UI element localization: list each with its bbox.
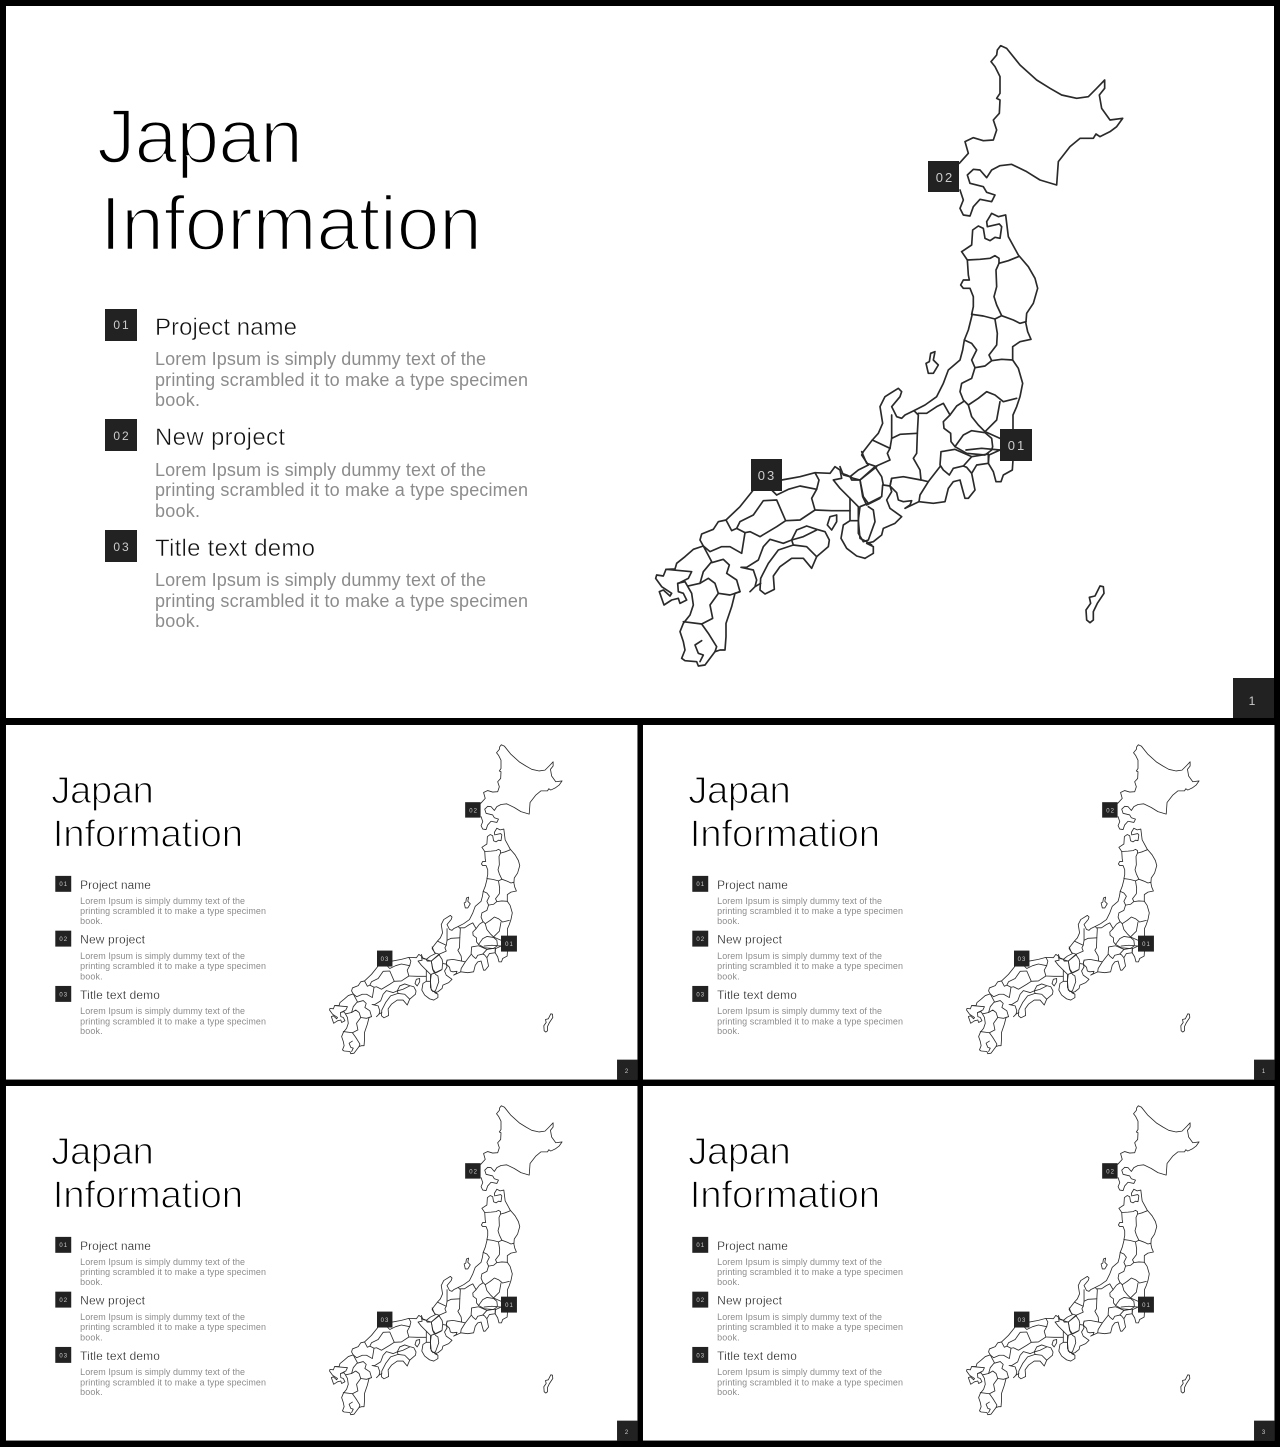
panel: thumbnail slide 2 <box>6 725 637 1080</box>
panel: thumbnail slide 5: 3 <box>1262 1430 1266 1436</box>
panel: thumbnail slide 2: 02 <box>469 809 478 815</box>
panel: thumbnail slide 2: printing scrambled it to make a type specimen <box>80 1016 266 1026</box>
map badge 02 <box>928 161 959 192</box>
panel: thumbnail slide 3: Japan <box>688 769 791 812</box>
panel: thumbnail slide 3: 01 <box>696 882 705 888</box>
panel: thumbnail slide 3: 03 <box>1018 957 1026 963</box>
list item 01: printing scrambled it to make a type specimen <box>155 370 528 390</box>
panel: thumbnail slide 5: 01 <box>696 1243 705 1249</box>
list item 03: Lorem Ipsum is simply dummy text of the <box>155 570 486 590</box>
page number tab: 1 <box>1249 694 1256 708</box>
panel: thumbnail slide 4: Lorem Ipsum is simply dummy text of the <box>80 1257 245 1267</box>
panel: thumbnail slide 4: Title text demo <box>80 1349 160 1363</box>
panel: thumbnail slide 2: book. <box>80 971 103 981</box>
panel: thumbnail slide 5: 02 <box>696 1298 705 1304</box>
panel: thumbnail slide 2: book. <box>80 916 103 926</box>
panel: thumbnail slide 2: Project name <box>80 878 151 892</box>
map badge 02: 02 <box>936 170 954 185</box>
panel: thumbnail slide 5: book. <box>717 1387 740 1397</box>
panel: thumbnail slide 5: 02 <box>1106 1170 1115 1176</box>
panel: thumbnail slide 5: Lorem Ipsum is simply dummy text of the <box>717 1312 882 1322</box>
title: Information <box>100 181 482 267</box>
list item 01: book. <box>155 390 200 410</box>
panel: thumbnail slide 4: 03 <box>59 1353 68 1359</box>
panel: thumbnail slide 3: Lorem Ipsum is simply dummy text of the <box>717 1006 882 1016</box>
panel: thumbnail slide 2: printing scrambled it to make a type specimen <box>80 906 266 916</box>
list item 01: Lorem Ipsum is simply dummy text of the <box>155 349 486 369</box>
panel: thumbnail slide 4: book. <box>80 1277 103 1287</box>
panel: thumbnail slide 4: 01 <box>59 1243 68 1249</box>
map of Japan <box>656 46 1123 666</box>
panel: thumbnail slide 2: 01 <box>505 942 514 948</box>
panel: thumbnail slide 2: 2 <box>625 1069 629 1075</box>
panel: thumbnail slide 5: printing scrambled it to make a type specimen <box>717 1322 903 1332</box>
panel: thumbnail slide 5: 03 <box>1018 1318 1026 1324</box>
panel: thumbnail slide 5: Project name <box>717 1239 788 1253</box>
panel: thumbnail slide 3: book. <box>717 1026 740 1036</box>
panel: thumbnail slide 2: Information <box>53 812 243 855</box>
panel: thumbnail slide 3: Project name <box>717 878 788 892</box>
panel: thumbnail slide 5: 01 <box>1142 1303 1151 1309</box>
map badge 03 <box>751 459 782 491</box>
map badge 01 <box>1000 429 1032 461</box>
panel: thumbnail slide 5: Lorem Ipsum is simply dummy text of the <box>717 1367 882 1377</box>
panel: thumbnail slide 5: Lorem Ipsum is simply dummy text of the <box>717 1257 882 1267</box>
panel: thumbnail slide 3: Lorem Ipsum is simply dummy text of the <box>717 951 882 961</box>
panel: thumbnail slide 2: Lorem Ipsum is simply dummy text of the <box>80 896 245 906</box>
panel: thumbnail slide 4: Lorem Ipsum is simply dummy text of the <box>80 1367 245 1377</box>
panel: thumbnail slide 3: 02 <box>1106 809 1115 815</box>
panel: thumbnail slide 3: 02 <box>696 937 705 943</box>
panel: thumbnail slide 2: 03 <box>59 992 68 998</box>
list item 03: book. <box>155 611 200 631</box>
panel: thumbnail slide 2: Japan <box>51 769 154 812</box>
panel: thumbnail slide 4: 03 <box>381 1318 389 1324</box>
list item 03: printing scrambled it to make a type specimen <box>155 591 528 611</box>
panel: thumbnail slide 3: 1 <box>1262 1069 1266 1075</box>
panel: thumbnail slide 5: book. <box>717 1277 740 1287</box>
panel: thumbnail slide 3: 03 <box>696 992 705 998</box>
panel: thumbnail slide 3: printing scrambled it to make a type specimen <box>717 1016 903 1026</box>
page number tab <box>1233 678 1274 718</box>
panel: thumbnail slide 4: Project name <box>80 1239 151 1253</box>
title <box>97 94 482 267</box>
panel: thumbnail slide 2: Lorem Ipsum is simply dummy text of the <box>80 951 245 961</box>
panel: thumbnail slide 2: 01 <box>59 882 68 888</box>
list item 02: book. <box>155 501 200 521</box>
panel: thumbnail slide 3: 01 <box>1142 942 1151 948</box>
panel: thumbnail slide 4: Lorem Ipsum is simply dummy text of the <box>80 1312 245 1322</box>
panel: thumbnail slide 4: book. <box>80 1387 103 1397</box>
panel: thumbnail slide 2: Lorem Ipsum is simply dummy text of the <box>80 1006 245 1016</box>
list item 03: Title text demo <box>155 535 315 562</box>
panel: thumbnail slide 4: printing scrambled it to make a type specimen <box>80 1322 266 1332</box>
panel: thumbnail slide 5: Title text demo <box>717 1349 797 1363</box>
list item 02: 02 <box>113 429 131 443</box>
panel: thumbnail slide 5 <box>643 1086 1274 1441</box>
list item 02: New project <box>155 424 285 451</box>
list item 03: 03 <box>113 540 131 554</box>
panel: thumbnail slide 4: 02 <box>59 1298 68 1304</box>
list item 03 <box>105 530 528 631</box>
panel: thumbnail slide 2: book. <box>80 1026 103 1036</box>
list item 01 <box>105 309 528 410</box>
panel: thumbnail slide 4: 01 <box>505 1303 514 1309</box>
panel: thumbnail slide 4: 02 <box>469 1170 478 1176</box>
panel: thumbnail slide 3: New project <box>717 933 783 947</box>
list item 02: Lorem Ipsum is simply dummy text of the <box>155 460 486 480</box>
panel: thumbnail slide 2: 02 <box>59 937 68 943</box>
panel: thumbnail slide 4: Japan <box>51 1130 154 1173</box>
list item 01: 01 <box>113 318 131 332</box>
list item 01: Project name <box>155 314 297 341</box>
panel: thumbnail slide 3: book. <box>717 916 740 926</box>
panel: thumbnail slide 2: New project <box>80 933 146 947</box>
panel: thumbnail slide 5: New project <box>717 1294 783 1308</box>
panel: thumbnail slide 5: 03 <box>696 1353 705 1359</box>
panel: thumbnail slide 4: 2 <box>625 1430 629 1436</box>
panel: thumbnail slide 4: printing scrambled it to make a type specimen <box>80 1267 266 1277</box>
panel: thumbnail slide 4: New project <box>80 1294 146 1308</box>
panel: thumbnail slide 4: Information <box>53 1173 243 1216</box>
title: Japan <box>97 94 303 180</box>
panel: thumbnail slide 3: Lorem Ipsum is simply dummy text of the <box>717 896 882 906</box>
panel: thumbnail slide 2: printing scrambled it to make a type specimen <box>80 961 266 971</box>
panel: thumbnail slide 3 <box>643 725 1274 1080</box>
map badge 03: 03 <box>758 468 776 483</box>
panel: thumbnail slide 4 <box>6 1086 637 1441</box>
panel: thumbnail slide 2: Title text demo <box>80 988 160 1002</box>
map badge 01: 01 <box>1008 438 1026 453</box>
panel: thumbnail slide 5: Information <box>690 1173 880 1216</box>
panel: thumbnail slide 3: Information <box>690 812 880 855</box>
panel: thumbnail slide 5: printing scrambled it to make a type specimen <box>717 1267 903 1277</box>
panel: thumbnail slide 3: printing scrambled it to make a type specimen <box>717 906 903 916</box>
list item 02 <box>105 419 528 521</box>
panel: thumbnail slide 5: printing scrambled it to make a type specimen <box>717 1377 903 1387</box>
list item 02: printing scrambled it to make a type specimen <box>155 480 528 500</box>
panel: thumbnail slide 4: book. <box>80 1332 103 1342</box>
panel: thumbnail slide 3: Title text demo <box>717 988 797 1002</box>
panel: thumbnail slide 3: book. <box>717 971 740 981</box>
panel: thumbnail slide 5: Japan <box>688 1130 791 1173</box>
panel: thumbnail slide 2: 03 <box>381 957 389 963</box>
panel: thumbnail slide 4: printing scrambled it to make a type specimen <box>80 1377 266 1387</box>
panel: thumbnail slide 3: printing scrambled it to make a type specimen <box>717 961 903 971</box>
panel: thumbnail slide 5: book. <box>717 1332 740 1342</box>
panel: main slide <box>6 6 1274 718</box>
